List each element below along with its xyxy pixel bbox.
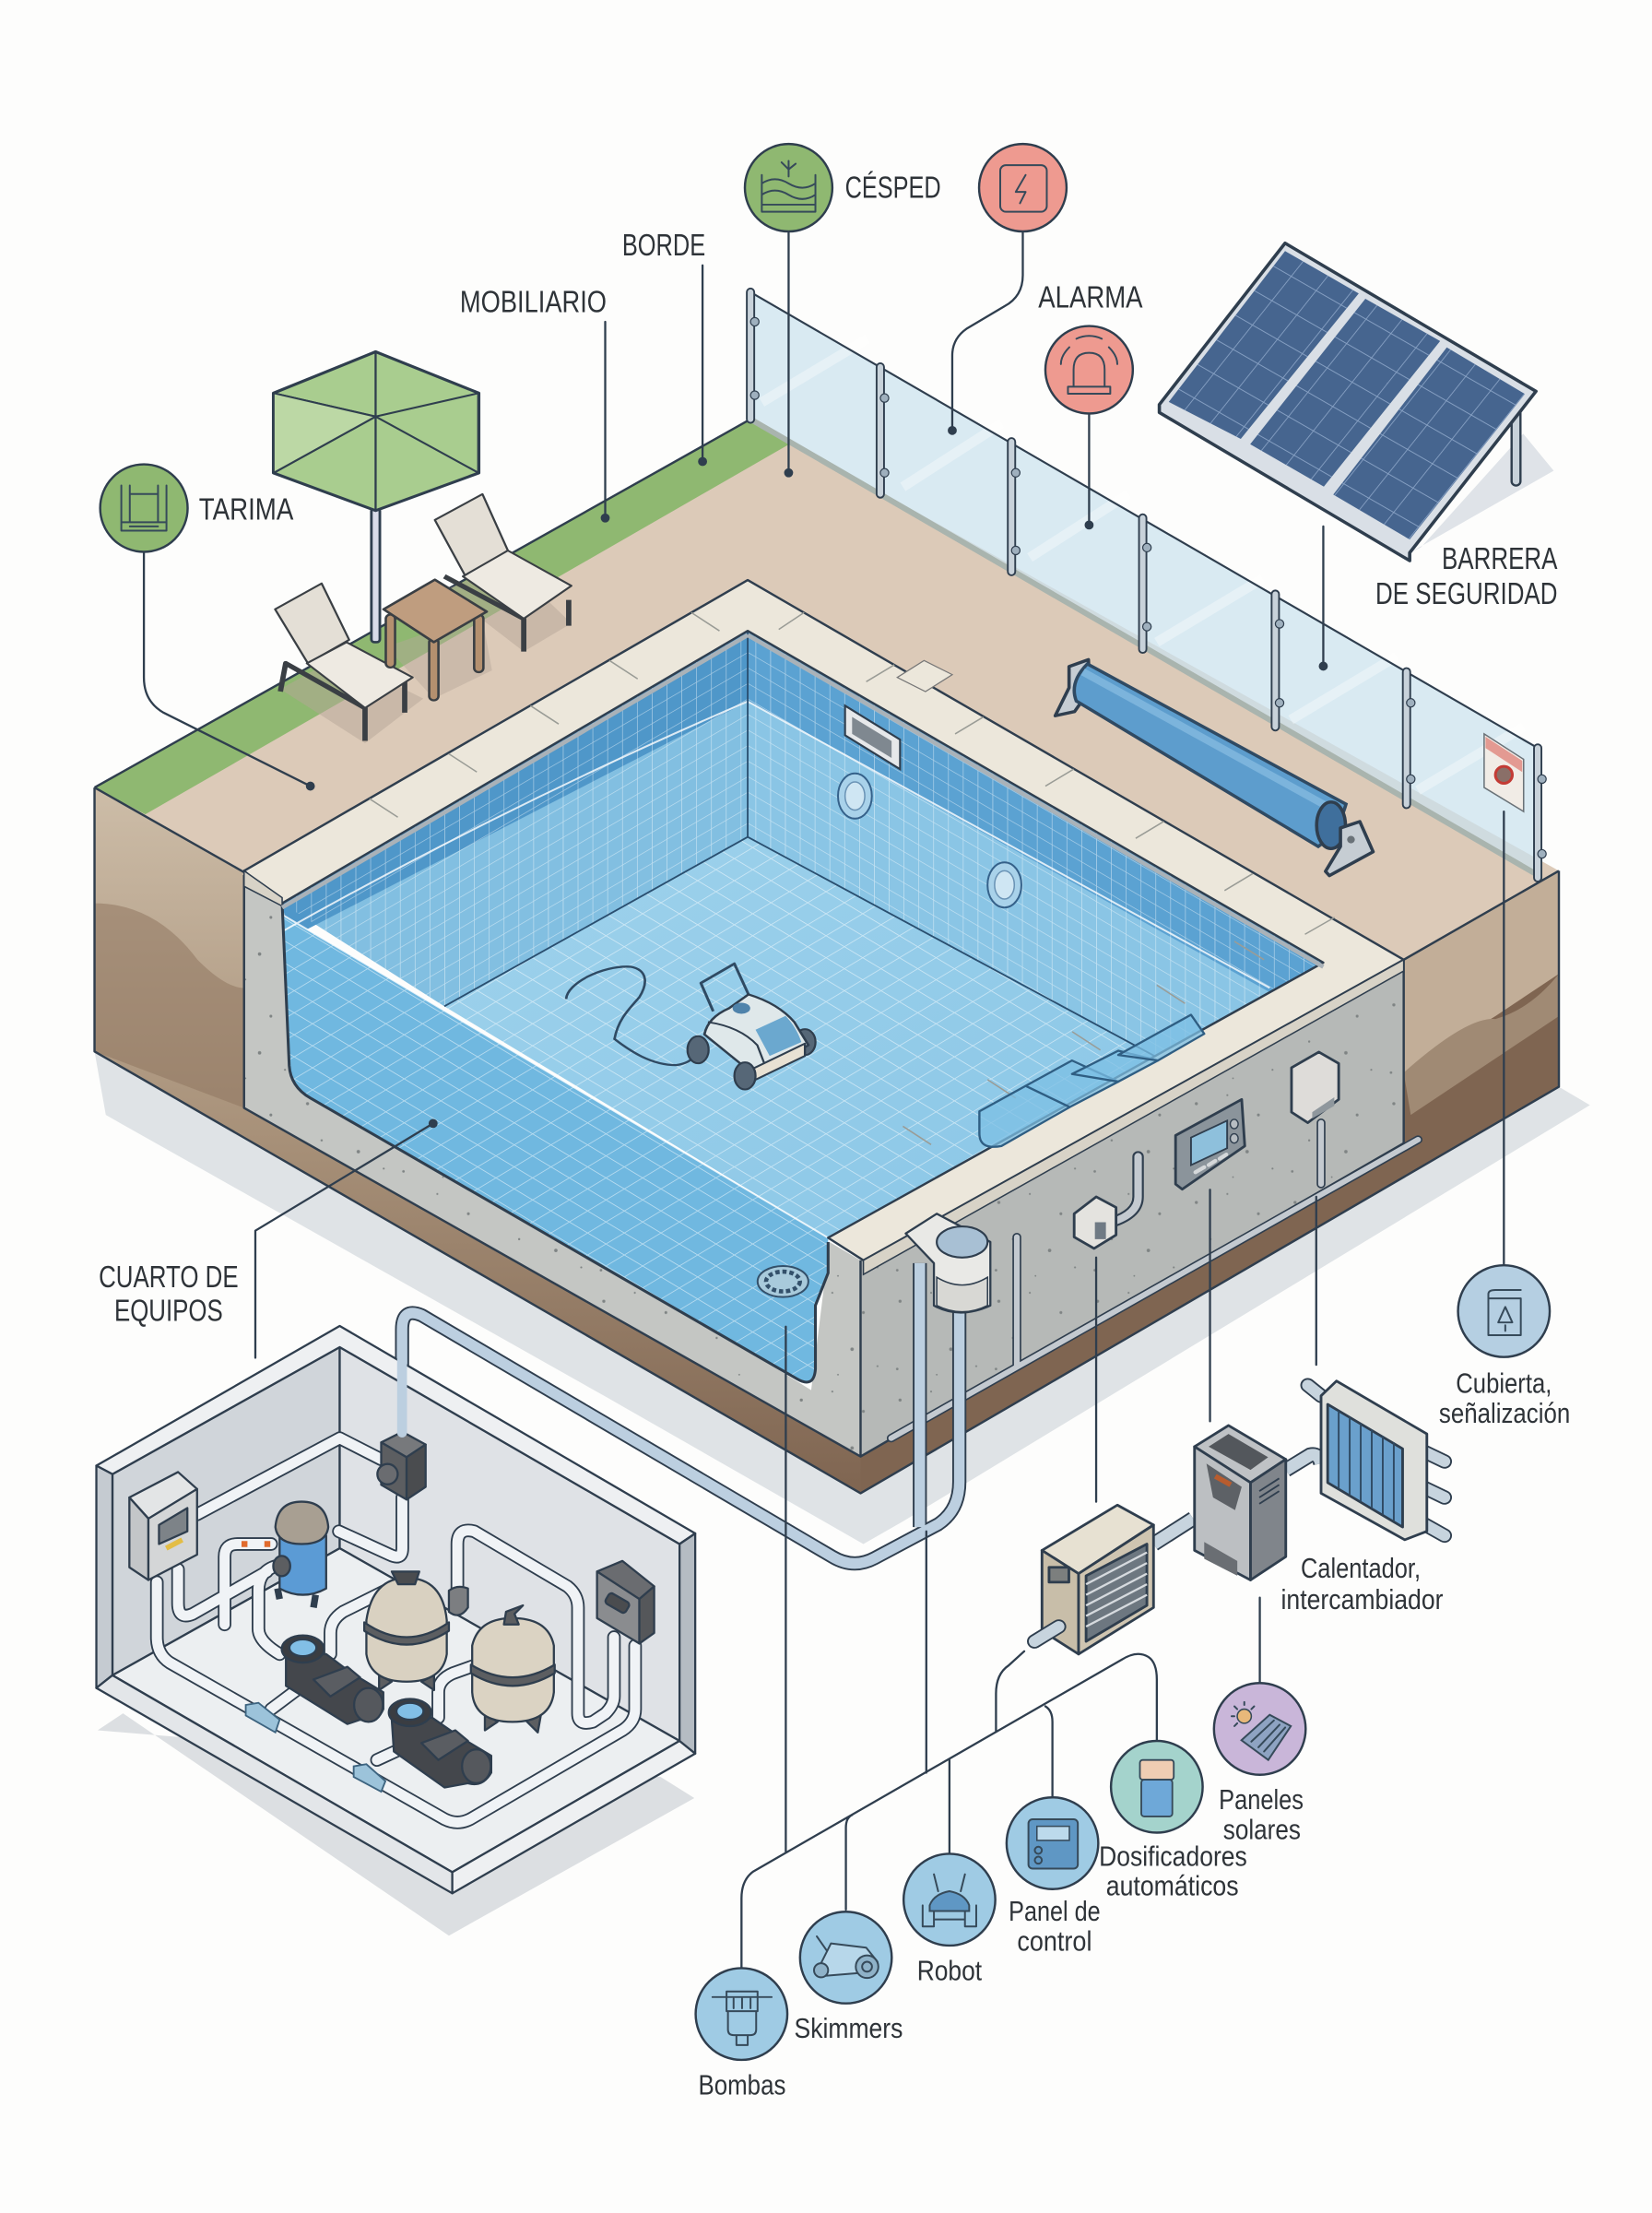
icon: sun and panel [1237,1710,1251,1723]
label: calentador, intercambiador: Calentador, [1301,1553,1421,1584]
skimmer and supply pipe [402,1213,990,1564]
icon: skimmer basket [713,1992,772,2045]
label: mobiliario: MOBILIARIO [460,285,607,319]
equipment room [97,1326,695,1935]
ground shadow of pool block [95,1051,1590,1544]
label: calentador, intercambiador [1281,1553,1444,1615]
label: dosificadores automáticos [1099,1741,1247,1902]
front water [282,915,828,1382]
pool cross-section block [95,787,1559,1493]
icon: skimmer body [905,1213,990,1312]
left wall [282,631,748,1006]
icon: robot [934,1875,965,1891]
label: alarma: ALARMA [1038,281,1143,315]
pump 2 [389,1699,491,1788]
label: barrera de seguridad: BARRERA [1442,542,1558,576]
label: césped [745,144,941,231]
soil right [860,870,1559,1493]
label: césped: CÉSPED [845,171,941,205]
label: cubierta, señalización [1439,1265,1570,1429]
icon: dosing canister [1139,1760,1174,1780]
icon: heat pump [1034,1505,1153,1654]
robot cleaner [566,964,816,1089]
icon: cover [1488,1290,1521,1335]
label: cubierta, señalización: Cubierta, [1456,1368,1552,1400]
icon: pool light 2 [987,862,1021,907]
connectors [1153,1455,1321,1544]
room shadow [98,1713,694,1935]
icon: deck [122,486,167,531]
conduit along wall [891,1123,1418,1438]
pool interior [282,631,1323,1382]
icon: radiator exchanger [1308,1381,1445,1540]
wall box [1292,1052,1339,1123]
room pipes [157,1438,635,1822]
electrical box right [597,1561,655,1643]
junction box [1074,1197,1116,1249]
label: robot [903,1853,996,1986]
sand filter tank 2 [471,1605,555,1733]
pool wall fittings: return slot, lights, deck hatch [758,660,1021,1297]
label: borde: BORDE [622,229,705,263]
icon: controller [1029,1819,1078,1869]
deck and grass [95,420,1559,960]
label: skimmers: Skimmers [795,2013,903,2044]
control display [1175,1099,1245,1189]
icon: floor drain [758,1266,808,1297]
junction box on wall [377,1432,426,1499]
label: paneles solares: solares [1223,1814,1301,1845]
floor [444,837,1154,1237]
icon: electric switch [979,144,1067,231]
label: tarima: TARIMA [199,492,294,527]
label: panel de control [1007,1797,1101,1957]
parasol pole [372,508,380,642]
label: panel de control: Panel de [1009,1896,1101,1927]
icon: lawn layers [761,160,816,212]
cover roller [1056,659,1373,876]
blue fittings [246,1703,385,1792]
cut profile [282,904,828,1382]
solar panel array [1160,243,1553,561]
label: paneles solares: Paneles [1219,1784,1304,1816]
icon: heater [1195,1426,1286,1580]
grass strip [95,420,788,814]
label: cubierta, señalización: señalización [1439,1398,1570,1429]
concrete right wall [860,960,1404,1457]
parasol canopy [274,351,478,511]
glass safety fence [750,292,1546,878]
label: dosificadores automáticos: Dosificadores [1099,1840,1247,1872]
label: dosificadores automáticos: automáticos [1106,1871,1239,1902]
furniture shadows [280,657,423,743]
pipe network [402,1263,960,1564]
soil left [95,787,860,1493]
label: bombas: Bombas [699,2069,785,2101]
sand filter tank 1 [364,1571,468,1690]
lounger left [275,584,413,740]
label: tarima [100,465,294,551]
wall equipment, heater group and conduits [891,1052,1445,1654]
pump 1 [282,1636,384,1724]
lounger right [435,494,572,652]
label: skimmers [795,1911,903,2044]
furniture: parasol, loungers and table [274,351,572,743]
side table [384,580,487,696]
label: bombas [696,1968,787,2101]
pool steps [979,1015,1204,1147]
label: cuarto de equipos [99,1260,239,1329]
icon: hatch [897,660,952,692]
leader lines with endpoint dots [144,233,1504,1969]
blue cartridge filter [242,1502,328,1607]
panel shadow [1410,433,1553,552]
icon: pool light 1 [838,774,872,819]
control box [129,1472,197,1580]
icon: sweeper [821,1944,878,1976]
right wall [748,631,1323,1056]
label: cuarto de equipos: EQUIPOS [114,1295,223,1329]
room walls [112,1347,340,1675]
icon: wall slot [845,705,900,769]
warning sign [1484,734,1524,811]
wall pipe to box [1112,1156,1139,1223]
label: robot: Robot [917,1955,983,1986]
label: paneles solares [1214,1683,1305,1845]
label: barrera de seguridad: DE SEGURIDAD [1375,577,1557,611]
concrete left cut [244,875,860,1457]
room supply pipe overlap [402,1313,422,1433]
coping [244,580,1404,1274]
label: calentador, intercambiador: intercambiador [1281,1584,1444,1615]
icon: alarm beacon [1045,326,1133,413]
label: barrera de seguridad [1375,542,1558,611]
label: panel de control: control [1017,1925,1092,1957]
label: cuarto de equipos: CUARTO DE [99,1260,239,1295]
